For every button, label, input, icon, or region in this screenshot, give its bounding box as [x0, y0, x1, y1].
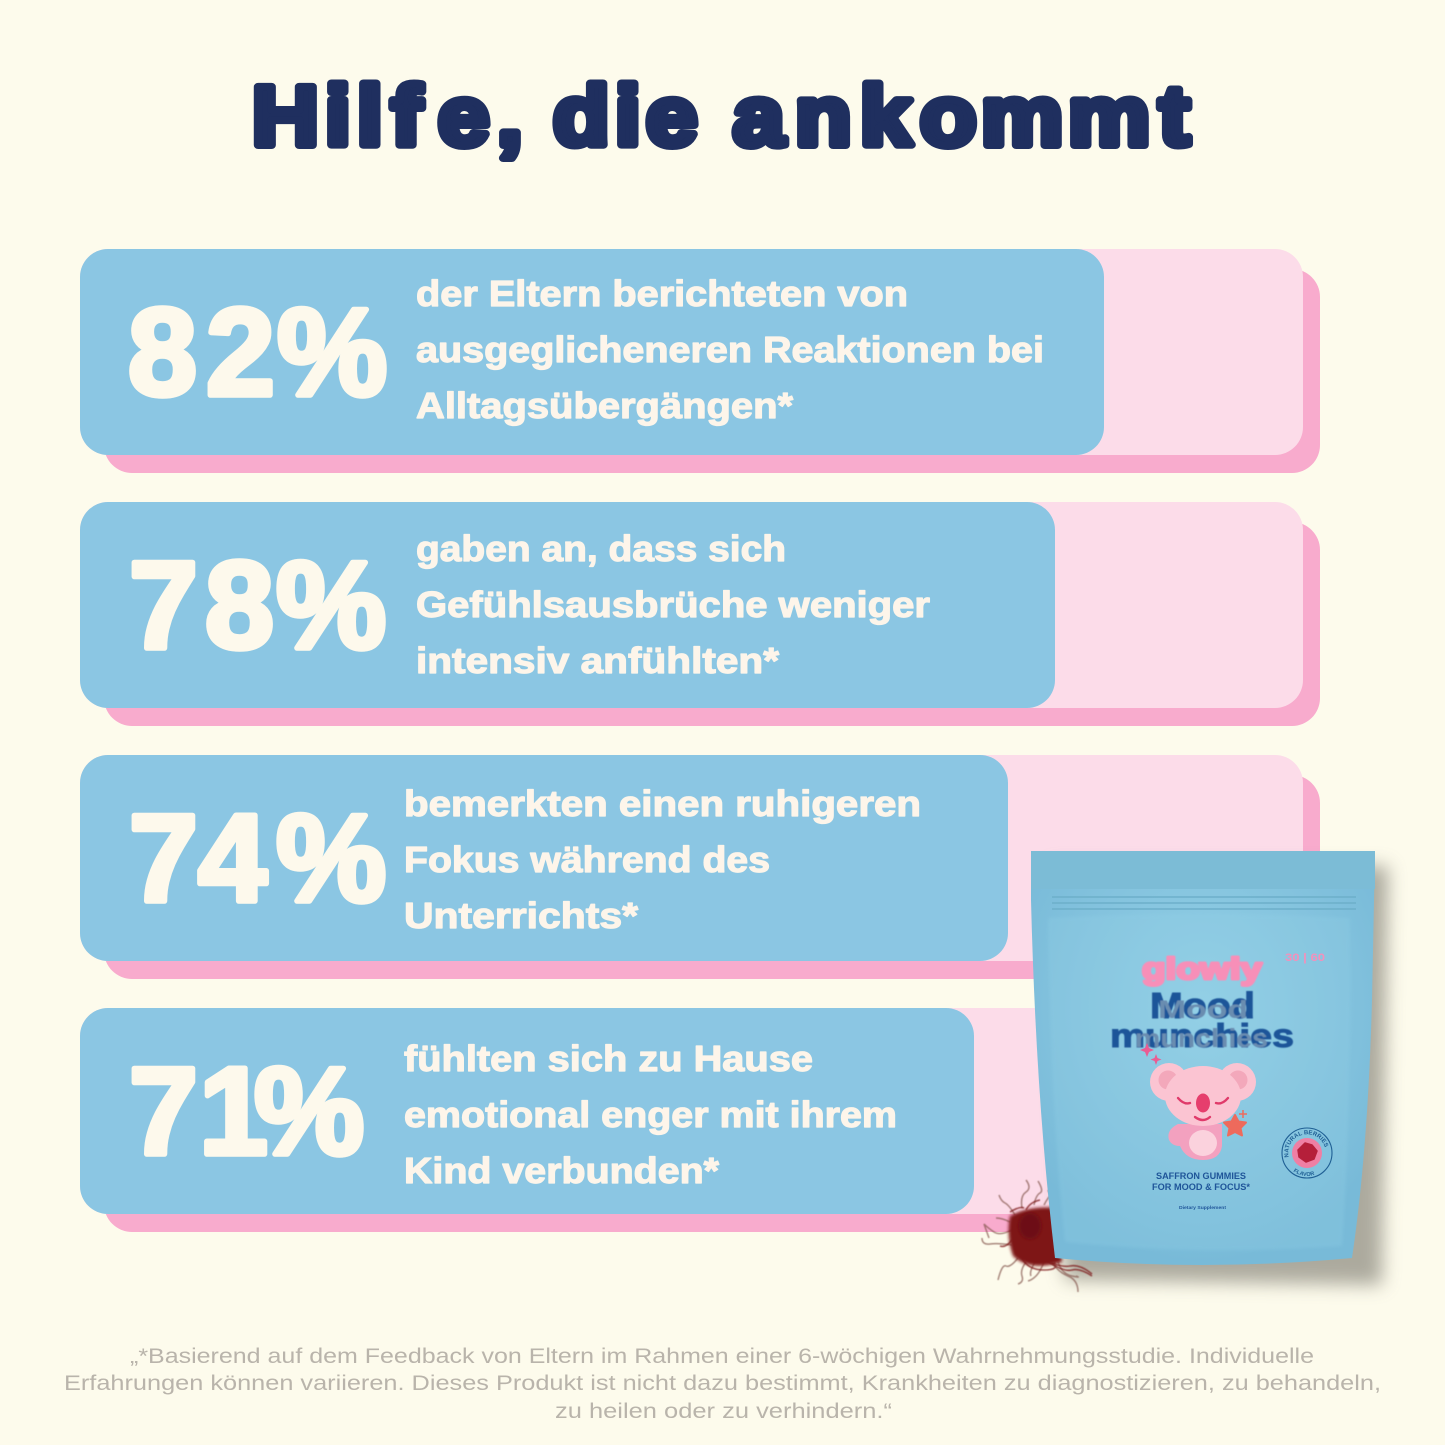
description: emotional enger mit ihrem — [404, 1094, 897, 1135]
pouch zipper — [1052, 897, 1356, 909]
panel: stat 82% — [80, 249, 1320, 473]
bar track — [80, 1008, 1303, 1214]
bar fill — [80, 1008, 974, 1214]
description: Kind verbunden* — [404, 1150, 719, 1191]
title: Hilfe, die ankommt — [252, 69, 1190, 163]
description: bemerkten einen ruhigeren — [404, 783, 921, 824]
bar track — [80, 502, 1303, 708]
percentage: 74% — [129, 790, 386, 928]
percentage: 71% — [129, 1043, 364, 1181]
description: der Eltern berichteten von — [416, 273, 908, 314]
panel: stat 78% — [80, 502, 1320, 726]
bar shadow — [104, 775, 1320, 979]
description: Alltagsübergängen* — [416, 385, 793, 426]
panel: stat 74% — [80, 755, 1320, 979]
bar shadow — [104, 1028, 1320, 1232]
description: Gefühlsausbrüche weniger — [416, 584, 930, 625]
pouch body — [1031, 851, 1375, 1265]
icon: koala mascot — [1140, 1043, 1256, 1160]
product tagline: Dietary Supplement — [1179, 1205, 1227, 1210]
description — [404, 1038, 897, 1191]
footnote — [64, 1345, 1381, 1423]
bar fill — [80, 755, 1008, 961]
footnote: „*Basierend auf dem Feedback von Eltern im Rahmen einer 6-wöchigen Wahrnehmungsstudie. Individuelle — [130, 1345, 1314, 1368]
product name: Mood — [1150, 985, 1255, 1026]
product tagline: SAFFRON GUMMIES — [1156, 1171, 1246, 1182]
flavor badge: FLAVOR — [1294, 1168, 1314, 1176]
pack size: 30 | 60 — [1285, 952, 1325, 964]
percentage: 78% — [129, 537, 386, 675]
product tagline — [1152, 1171, 1250, 1210]
description: Unterrichts* — [404, 895, 638, 936]
description: fühlten sich zu Hause — [404, 1038, 813, 1079]
product name — [1110, 985, 1294, 1054]
brand name: glowly — [1142, 951, 1263, 986]
pouch top seal — [1031, 851, 1375, 889]
saffron pile — [982, 1180, 1092, 1292]
description: ausgeglicheneren Reaktionen bei — [416, 329, 1044, 370]
percentage: 82% — [128, 284, 387, 422]
flavor badge — [1281, 1128, 1332, 1178]
product tagline: FOR MOOD & FOCUS* — [1152, 1182, 1250, 1193]
description — [416, 528, 930, 681]
description — [404, 783, 921, 936]
bar fill — [80, 502, 1055, 708]
description: gaben an, dass sich — [416, 528, 786, 569]
product shadow — [1050, 866, 1388, 1285]
description: intensiv anfühlten* — [416, 640, 779, 681]
product name: Mood — [1158, 996, 1248, 1024]
description — [416, 273, 1044, 426]
icon: star — [1224, 1115, 1246, 1136]
product name: munchies — [1135, 1023, 1268, 1053]
product name: munchies — [1110, 1017, 1294, 1054]
description: Fokus während des — [404, 839, 770, 880]
bar track — [80, 755, 1303, 961]
product pouch — [1031, 851, 1375, 1265]
bar shadow — [104, 522, 1320, 726]
bar shadow — [104, 269, 1320, 473]
bar fill — [80, 249, 1104, 455]
footnote: Erfahrungen können variieren. Dieses Produkt ist nicht dazu bestimmt, Krankheiten zu diagnostizieren, zu behandeln, — [64, 1372, 1381, 1395]
footnote: zu heilen oder zu verhindern.“ — [555, 1400, 892, 1423]
bar track — [80, 249, 1303, 455]
panel: stat 71% — [80, 1008, 1320, 1232]
flavor badge: NATURAL BERRIES — [1284, 1130, 1328, 1158]
pouch inner panel — [1048, 914, 1350, 1250]
